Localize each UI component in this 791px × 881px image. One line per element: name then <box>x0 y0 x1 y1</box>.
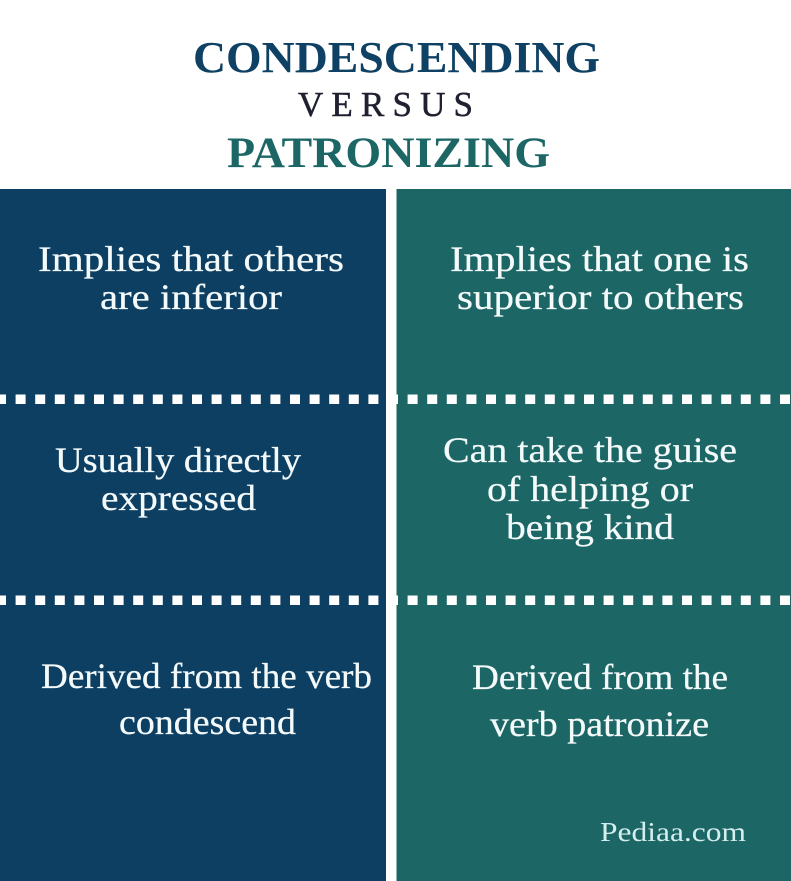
text: row 2 left: Usually directly <box>55 440 301 480</box>
text: row 2 right: Can take the guise <box>443 430 737 470</box>
text: row 1 right <box>450 239 749 317</box>
divider: dotted row 2 <box>0 596 790 605</box>
text: row 1 right: Implies that one is <box>450 239 749 279</box>
text: row 2 right <box>443 430 737 547</box>
panel: condescending <box>0 189 386 881</box>
text: row 2 left: expressed <box>101 478 256 518</box>
text: row 1 left <box>38 239 344 317</box>
divider: dotted row 1 <box>0 394 790 404</box>
text: row 2 right: being kind <box>506 507 674 547</box>
heading: patronizing: PATRONIZING <box>227 130 550 177</box>
title <box>193 33 600 177</box>
heading: versus: VERSUS <box>298 85 473 124</box>
text: row 1 right: superior to others <box>457 277 744 317</box>
text: row 3 right: Derived from the <box>472 657 728 697</box>
text: row 2 left <box>55 440 301 518</box>
text: row 1 left: Implies that others <box>38 239 344 279</box>
text: row 3 left: Derived from the verb <box>41 656 372 696</box>
text: row 3 left: condescend <box>119 702 296 742</box>
heading: condescending: CONDESCENDING <box>193 33 600 82</box>
text: row 2 right: of helping or <box>487 469 693 509</box>
text: row 3 right: verb patronize <box>490 704 709 744</box>
logo: pediaa.com: Pediaa.com <box>600 817 746 847</box>
text: row 3 left <box>41 656 372 742</box>
text: row 3 right <box>472 657 728 744</box>
panel: patronizing <box>396 189 791 881</box>
text: row 1 left: are inferior <box>100 277 282 317</box>
